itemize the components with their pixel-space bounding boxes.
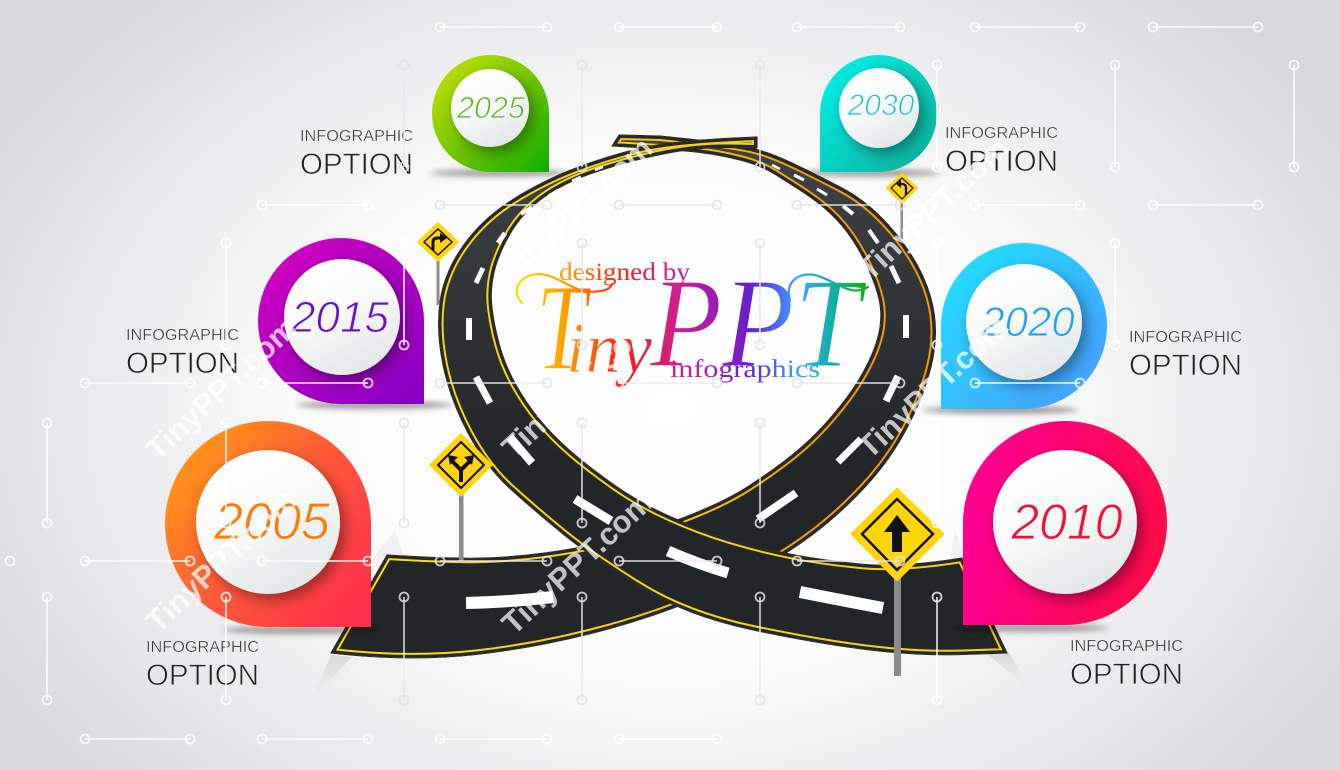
label: 2025 option: INFOGRAPHIC [300, 128, 413, 145]
watermarks: TinyPPT.com [495, 130, 659, 287]
sign: left turn [887, 174, 917, 240]
label: 2030 option [945, 125, 1058, 178]
label: 2015 option: OPTION [126, 347, 239, 380]
pin: 2015 [258, 238, 424, 404]
label: 2010 option [1070, 638, 1183, 691]
logo: PPT: PPT [649, 252, 867, 394]
year 2020: 2020 [980, 298, 1075, 345]
label: 2010 option: INFOGRAPHIC [1070, 638, 1183, 655]
label: 2020 option: OPTION [1129, 349, 1242, 382]
pin: 2010 [952, 421, 1167, 632]
label: 2025 option [300, 128, 413, 181]
watermarks: TinyPPT.com [139, 310, 303, 467]
logo: Tiny: iny [566, 308, 652, 388]
watermarks: TinyPPT.com [851, 308, 1015, 465]
road: loop strand running from bottom left over the right side [331, 135, 936, 658]
watermarks: TinyPPT.com [495, 308, 659, 465]
logo: Tiny: T [536, 259, 592, 396]
lane dashes: right strand [466, 165, 906, 603]
sign: fork [431, 435, 491, 562]
label: 2010 option: OPTION [1070, 658, 1183, 691]
label: 2030 option: OPTION [945, 145, 1058, 178]
year 2010: 2010 [1010, 494, 1123, 550]
lane dashes: left strand [469, 167, 883, 608]
year 2015: 2015 [290, 293, 389, 342]
label: 2015 option [126, 327, 239, 380]
label: 2005 option: INFOGRAPHIC [146, 639, 259, 656]
road: loop strand running from bottom right over the left side [439, 137, 1007, 655]
year 2030: 2030 [847, 89, 915, 122]
pin: 2025 [432, 55, 549, 172]
watermarks: TinyPPT.com [851, 130, 1015, 287]
label: 2030 option: INFOGRAPHIC [945, 125, 1058, 142]
pin shadows [297, 170, 1078, 414]
watermarks: TinyPPT.com [495, 484, 659, 641]
logo: infographics: infographics [670, 356, 820, 383]
sign: right turn [419, 224, 457, 305]
logo: designed by: designed by [559, 259, 691, 286]
year 2005: 2005 [213, 493, 331, 551]
logo swashes [517, 274, 868, 303]
pin: 2020 [941, 243, 1107, 409]
watermarks [139, 130, 1015, 641]
label: 2005 option [146, 639, 259, 692]
sign: straight ahead [853, 490, 942, 676]
label: 2020 option: INFOGRAPHIC [1129, 329, 1242, 346]
pin: 2030 [820, 55, 937, 172]
road end shadows [312, 530, 1030, 700]
label: 2020 option [1129, 329, 1242, 382]
central logo [517, 252, 868, 396]
label: 2025 option: OPTION [300, 148, 413, 181]
pin: 2005 [165, 421, 378, 634]
label: 2015 option: INFOGRAPHIC [126, 327, 239, 344]
year 2025: 2025 [456, 91, 526, 125]
logo: Tiny [536, 259, 652, 396]
label: 2005 option: OPTION [146, 659, 259, 692]
watermarks: TinyPPT.com [139, 482, 303, 639]
